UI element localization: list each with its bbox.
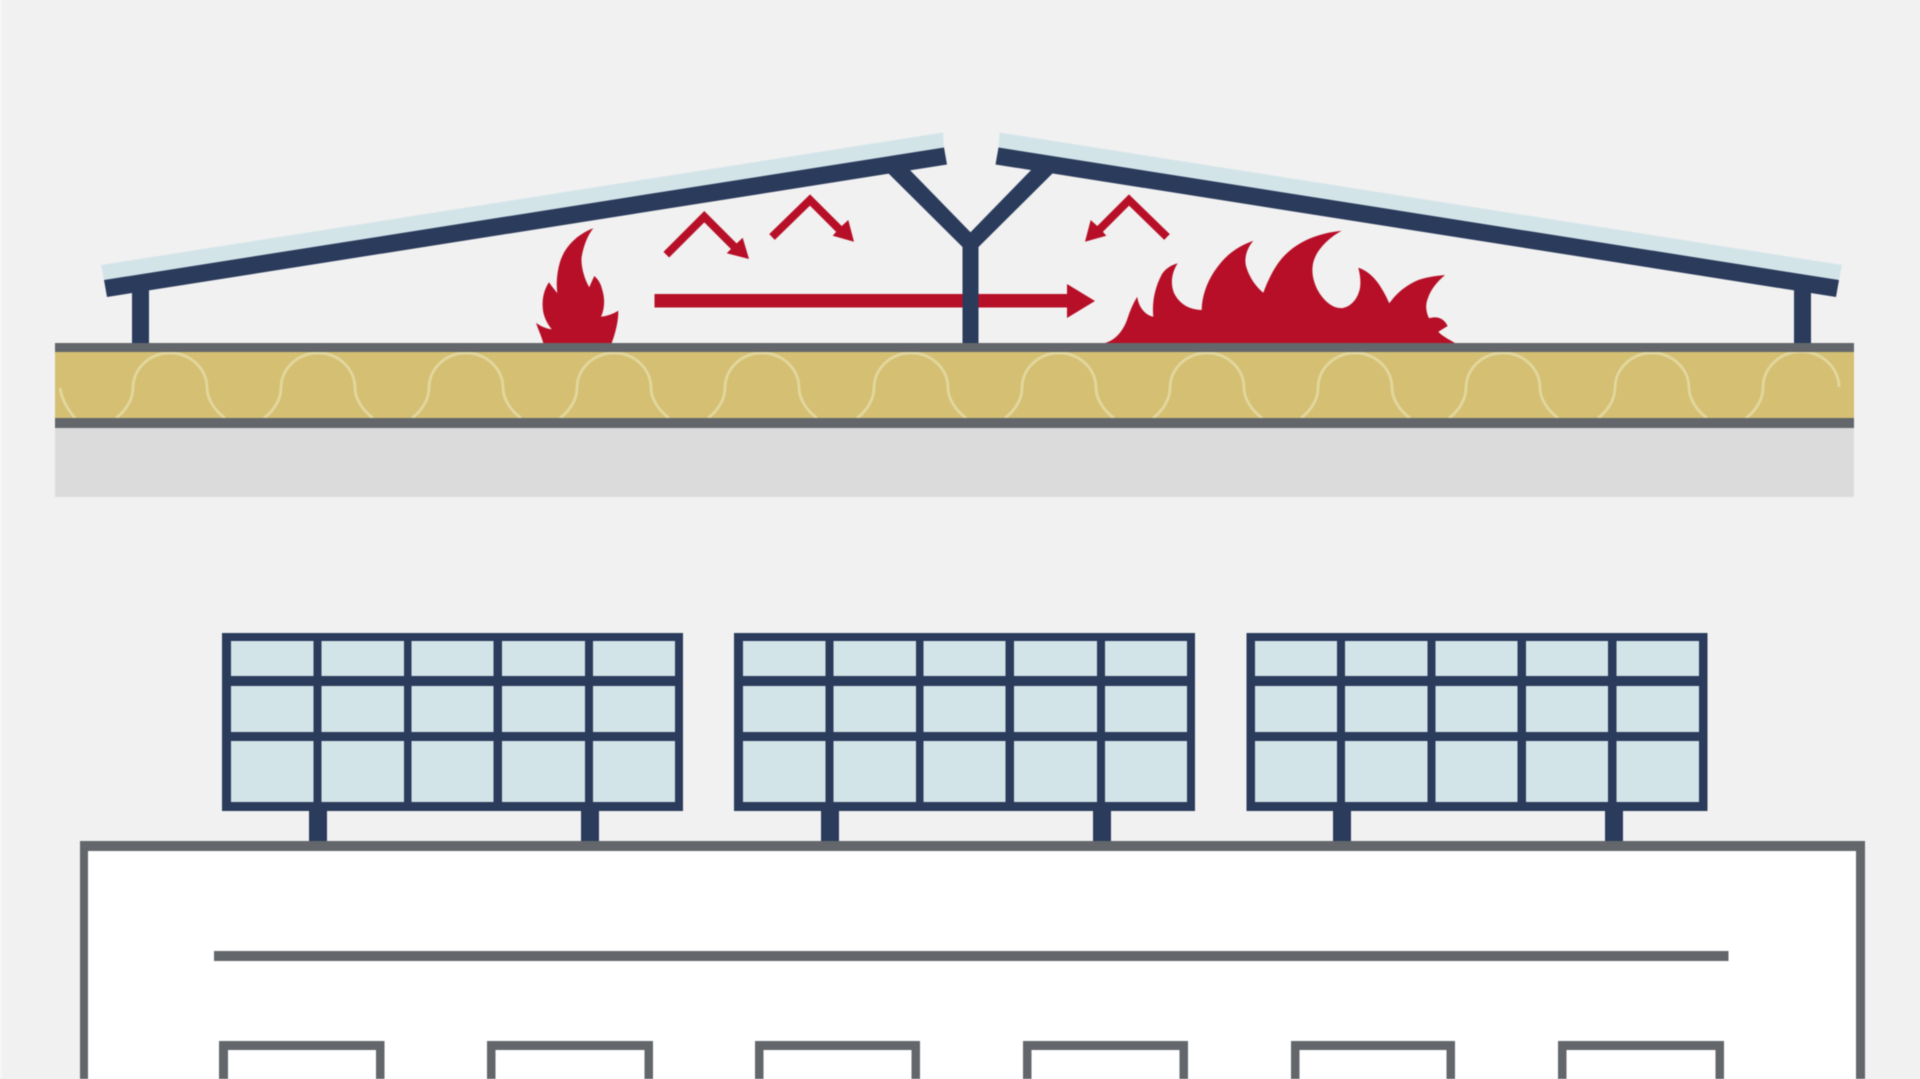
- horizontal arrow: fire spreads under the panels: [654, 284, 1095, 318]
- building cornice line: [214, 951, 1728, 961]
- window 4: [1023, 1041, 1188, 1079]
- building interior: [88, 851, 1856, 1079]
- roof deck cross-section: [55, 343, 1854, 497]
- left leg: [132, 288, 149, 343]
- right leg: [1794, 288, 1811, 343]
- left panel frame: [104, 148, 947, 297]
- concrete slab: [55, 428, 1854, 497]
- window 6: [1558, 1041, 1724, 1079]
- array 1 cells: [231, 641, 675, 802]
- window 3: [755, 1041, 920, 1079]
- heat arrow 2: [772, 200, 854, 242]
- solar array 3: [1246, 633, 1708, 843]
- solar array 1: [222, 633, 683, 843]
- window 1: [219, 1041, 384, 1079]
- left panel glass: [101, 132, 944, 280]
- array 3 cells: [1255, 641, 1699, 802]
- array 2 cells: [743, 641, 1187, 802]
- Y-shaped central support: [880, 165, 1061, 343]
- right tilted solar panel: [996, 132, 1842, 343]
- insulation layer: [55, 351, 1854, 419]
- window 5: [1291, 1041, 1455, 1079]
- bottom membrane: [55, 418, 1854, 428]
- icon: small flame: [536, 228, 618, 343]
- top membrane: [55, 343, 1854, 352]
- building outline: [80, 841, 1865, 1079]
- insulation wave pattern: [60, 352, 1839, 418]
- building: [80, 841, 1865, 1079]
- heat arrow 1: [666, 217, 749, 259]
- right panel frame: [996, 148, 1839, 297]
- icon: large flame: [1105, 231, 1455, 343]
- left tilted solar panel: [101, 132, 947, 343]
- solar array 2: [734, 633, 1195, 843]
- right panel glass: [998, 132, 1842, 280]
- heat arrow 3: [1085, 200, 1167, 242]
- window 2: [487, 1041, 653, 1079]
